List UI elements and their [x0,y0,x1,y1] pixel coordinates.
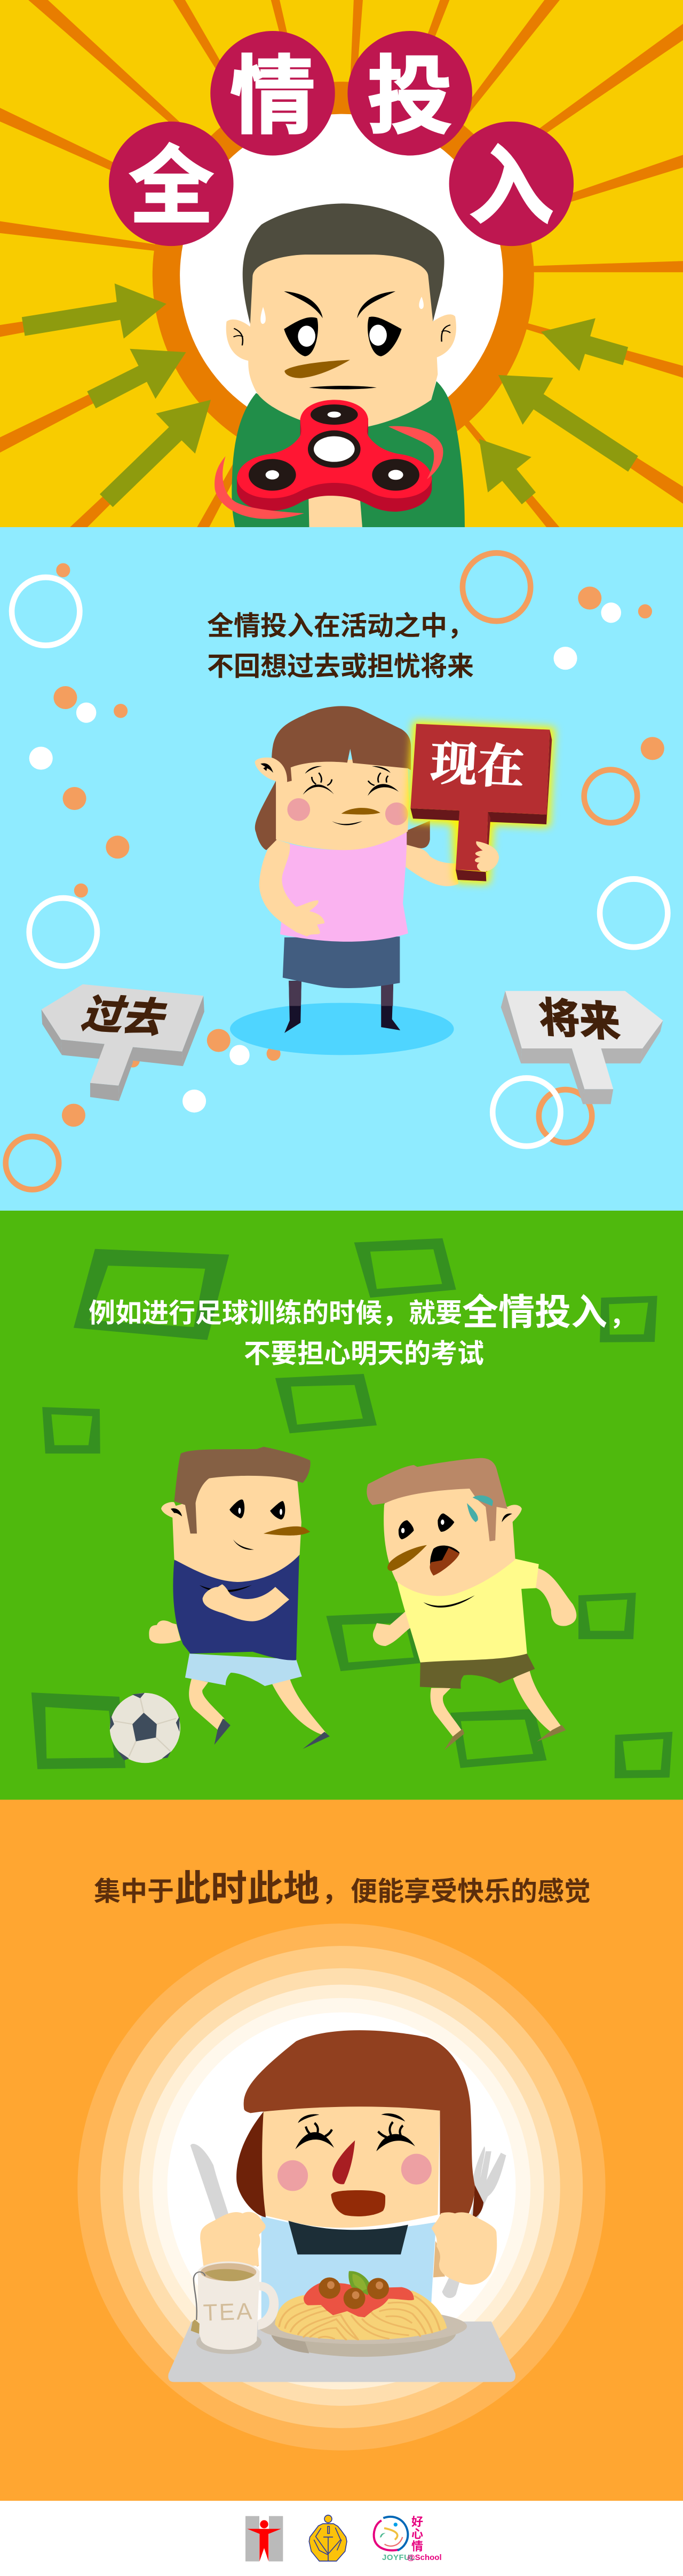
tea mug [191,2261,279,2354]
heading text: ， [609,1301,636,1331]
heading text [89,1292,636,1369]
halo ring [153,82,534,470]
sign: past: 过去 [77,992,174,1041]
heading text: 例如进行足球训练的时候，就要 [89,1298,462,1328]
heading text: 此时此地 [174,1869,320,1909]
sign: past [42,984,204,1101]
soccer ball [110,1693,180,1763]
heading text: 不要担心明天的考试 [244,1339,484,1369]
player two worried [367,1458,576,1750]
tray [168,2321,515,2382]
logo: joyful at school: 情 [411,2540,423,2553]
arrows pointing inward [22,283,638,507]
background frames [31,1238,672,1778]
plate of spaghetti [258,2271,467,2357]
logo: joyful at school: JOYFUL [382,2553,415,2562]
girl holding now sign: 现在 [429,738,526,795]
heading text: 全情投入 [462,1292,607,1333]
logo: joyful at school [374,2515,442,2562]
title badges: 情 [230,49,315,144]
heading text [94,1869,591,1909]
heading text: 全情投入在活动之中， [207,611,474,641]
panel: soccer example [0,1211,683,1800]
sign: future [501,991,663,1104]
logo: hands [309,2515,347,2561]
title badges [109,31,574,246]
title badges: 全 [129,139,214,234]
concentric glow [77,1923,606,2451]
fidget spinner [215,360,443,519]
heading text: ， [322,1877,348,1906]
girl holding now sign [230,706,552,1055]
sign: future: 将来 [537,995,622,1046]
title badges: 投 [367,49,452,144]
heading text: 不回想过去或担忧将来 [207,651,474,681]
boy holding fidget spinner [215,203,465,528]
panel: stay in the present [0,527,683,1211]
yellow glow [410,724,551,881]
heading text: 集中于 [94,1877,174,1906]
heading text: 便能享受快乐的感觉 [351,1877,591,1906]
decorative dots and rings [6,553,668,1189]
player one with ball [110,1446,330,1763]
logo: joyful at school: 心 [411,2527,423,2541]
logo: department of health [245,2516,283,2562]
footer with logos [0,2501,683,2576]
sunburst rays [0,0,683,528]
logo: joyful at school: @School [407,2553,442,2562]
girl eating [168,2030,515,2382]
logo: joyful at school: 好 [411,2515,423,2529]
tea label: TEA [203,2298,254,2326]
heading text [207,611,474,681]
panel: here and now eating [0,1800,683,2501]
title badges: 入 [468,139,554,234]
panel: title section [0,0,683,528]
sign: now [410,724,552,881]
